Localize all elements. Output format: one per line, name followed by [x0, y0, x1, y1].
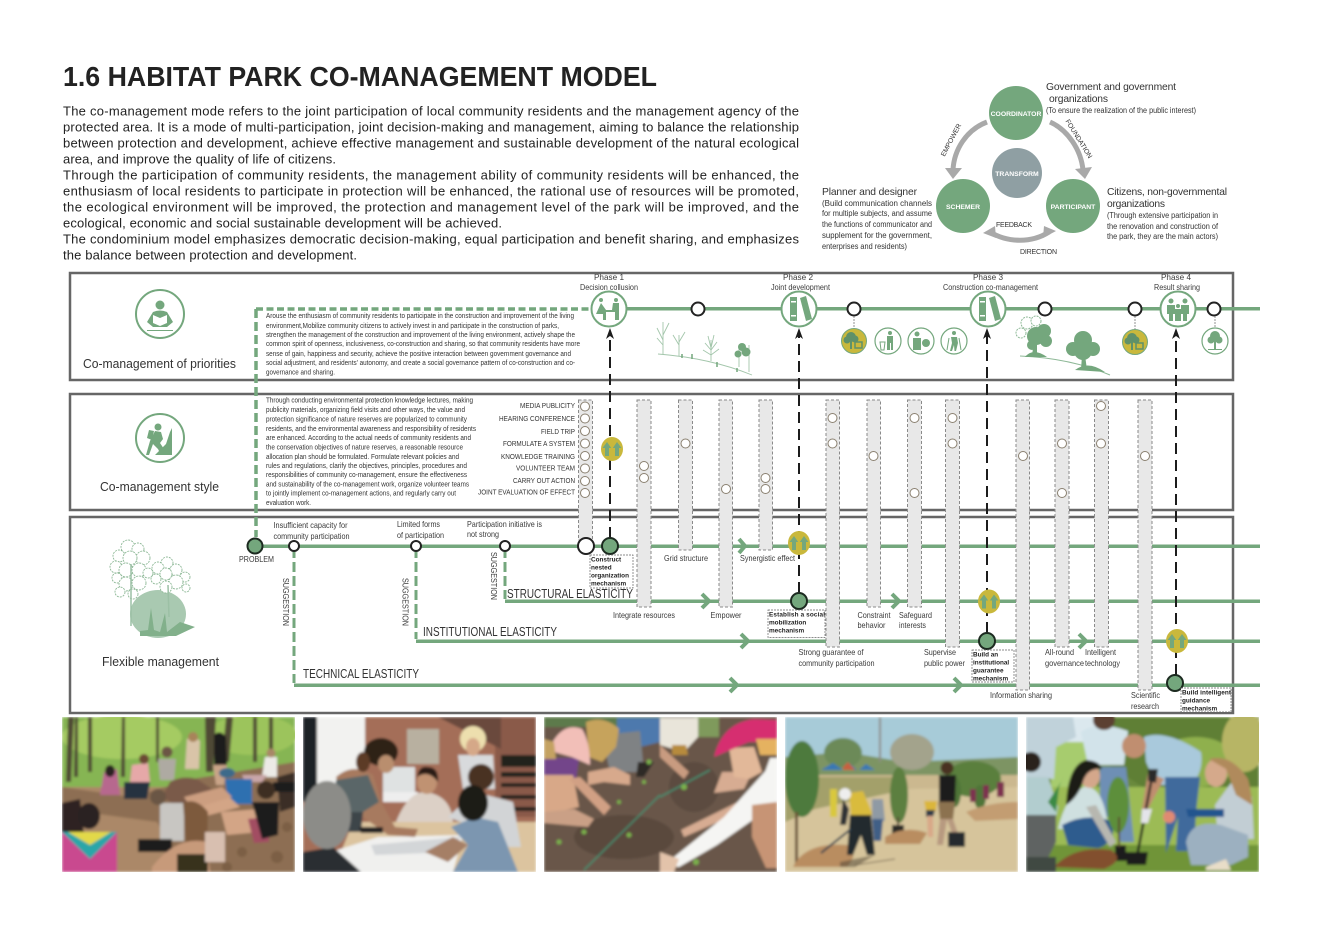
column labels: behavior	[858, 621, 886, 630]
photo: family planting tree	[1026, 717, 1259, 872]
intro text block: the balance between protection and development.	[63, 248, 357, 262]
icon: hiker	[136, 414, 184, 462]
activity labels: VOLUNTEER TEAM	[516, 466, 575, 472]
activity labels: FIELD TRIP	[541, 429, 575, 436]
citizens text: the park, they are the main actors)	[1107, 232, 1218, 241]
callout: social mobilization mechanism: mobilization	[769, 620, 806, 626]
paragraph: style description: residents, and the environmental awareness and responsibility of residents	[266, 426, 476, 433]
paragraph: style description: allocation plan should be formulated. Formulate relevant policies and	[266, 454, 459, 461]
column labels: Grid structure	[664, 554, 708, 563]
column labels: interests	[899, 621, 926, 630]
paragraph: style description: responsibilities of community co-management, ensure the effectiveness	[266, 472, 467, 479]
elasticity headings: TECHNICAL ELASTICITY	[303, 667, 420, 681]
icon: walker	[941, 328, 967, 354]
icon: litter	[875, 328, 901, 354]
arrow: foundation	[1050, 122, 1083, 170]
phase 2 label: Phase 2	[783, 273, 813, 282]
timeline nodes	[692, 302, 1220, 316]
paragraph: style description: rules and regulations, clarify the objectives, principles, procedures and	[266, 463, 467, 470]
column labels	[613, 554, 1160, 711]
intro text block: The condominium model emphasizes democratic decision-making, equal participation and benefit sharing, and emphasizes	[63, 232, 800, 246]
paragraph: style description: and sustainability of the co-management work, organize volunteer teams	[266, 482, 469, 488]
problem labels: community participation	[274, 532, 350, 541]
callout: institutional guarantee mechanism: institutional	[973, 660, 1009, 666]
problem labels: PROBLEM	[239, 555, 274, 564]
activity labels: CARRY OUT ACTION	[513, 478, 575, 485]
callout: institutional guarantee mechanism	[972, 650, 1014, 682]
citizens text	[1107, 187, 1227, 241]
phase 1 label: Phase 1	[594, 273, 624, 282]
callout: nested organization mechanism: mechanism	[591, 580, 626, 588]
timelines: elasticity lines	[255, 544, 1260, 687]
illustration: leafy trees on slope	[1016, 316, 1110, 375]
callout: nested organization mechanism: organization	[591, 572, 629, 580]
heading: co-management of priorities: Co-management of priorities	[83, 356, 236, 371]
photo: planting seedlings	[544, 717, 777, 872]
label: foundation: FOUNDATION	[1064, 119, 1093, 160]
arrowhead: foundation	[1075, 167, 1092, 179]
column labels: governance	[1045, 659, 1084, 668]
phase 2 label	[771, 273, 831, 292]
paragraph: style description: Through conducting environmental protection knowledge lectures, making	[266, 398, 473, 404]
intro text block: protected area. It is a mode of multi-participation, joint decision-making and management, aiming to balance the relationship	[63, 120, 799, 134]
phase 4 label: Result sharing	[1154, 283, 1200, 292]
callout: social mobilization mechanism: Establish a social	[769, 612, 825, 618]
paragraph: style description: publicity materials, organizing field visits and other ways, the value and	[266, 407, 465, 414]
icon: yellow tree two	[1122, 330, 1148, 354]
problem labels: not strong	[467, 530, 499, 539]
planner text: (Build communication channels	[822, 199, 932, 208]
government text: organizations	[1049, 94, 1108, 105]
callout: institutional guarantee mechanism: mechanism	[973, 676, 1008, 682]
suggestion labels: SUGGESTION	[400, 578, 410, 626]
intro text block: enthusiasm of local residents to participate in protection will be enhanced, the rational use of resources will be promoted,	[63, 184, 799, 198]
elasticity headings: INSTITUTIONAL ELASTICITY	[423, 625, 558, 639]
panel: flexible management	[70, 517, 1233, 713]
paragraph: priorities description: governance and sharing.	[266, 370, 335, 376]
phase 3 label: Phase 3	[973, 273, 1003, 282]
activity labels: KNOWLEDGE TRAINING	[501, 454, 575, 461]
paragraph: priorities description: sense of gain, happiness and security, achieve the positive interaction between government governance and	[266, 351, 571, 358]
column labels: Empower	[710, 611, 742, 620]
stakeholder cycle diagram	[822, 82, 1227, 256]
arrow: empower	[953, 122, 987, 170]
circle: schemer	[936, 179, 990, 233]
column labels: Synergistic effect	[740, 554, 796, 563]
phase 4 label: Phase 4	[1161, 273, 1191, 282]
elasticity headings: STRUCTURAL ELASTICITY	[507, 587, 634, 601]
photo: forest gathering	[62, 717, 295, 872]
government text: Government and government	[1046, 82, 1176, 93]
callout: intelligent guidance mechanism: guidance	[1182, 698, 1210, 704]
label: feedback: FEEDBACK	[996, 222, 1032, 229]
callout: nested organization mechanism: Construct	[591, 556, 622, 564]
column labels: technology	[1085, 659, 1121, 668]
dashed line: problem link	[254, 309, 258, 537]
citizens text: the renovation and construction of	[1107, 222, 1219, 231]
phase dashed arrows	[610, 336, 1176, 675]
activity labels: HEARING CONFERENCE	[499, 416, 575, 423]
planner text: supplement for the government,	[822, 231, 932, 240]
intro text block: between protection and development, achieve effective management and sustainable development of the natural ecological	[63, 136, 799, 150]
phase 3 label: Construction co-management	[943, 283, 1039, 292]
icon: yellow tree one	[842, 328, 866, 354]
problem labels: of participation	[397, 531, 444, 540]
label: empower: EMPOWER	[940, 123, 963, 158]
activity labels: JOINT EVALUATION OF EFFECT	[478, 490, 576, 496]
arrowhead: right	[1043, 226, 1056, 238]
phase arrowheads	[606, 328, 1180, 339]
callout: intelligent guidance mechanism: Build intelligent	[1182, 690, 1232, 696]
icon row	[842, 328, 1228, 354]
paragraph: priorities description: common spirit of openness, inclusiveness, co-construction and sharing, so that community residents have more	[266, 341, 580, 348]
grey activity columns	[578, 400, 1152, 690]
paragraph: priorities description	[266, 313, 580, 376]
intro text block: area, and improve the quality of life of citizens.	[63, 152, 336, 166]
citizens text: organizations	[1107, 199, 1165, 210]
paragraph: priorities description: environment,Mobilize community citizens to actively invest in and participate in the construction of parks,	[266, 323, 559, 330]
illustration: flexible trees	[110, 540, 195, 638]
problem labels: Insufficient capacity for	[274, 521, 348, 530]
illustration: bare trees on slope	[657, 322, 752, 375]
intro text block: ecological, economic and social sustainable development will be achieved.	[63, 216, 502, 230]
column labels: Supervise	[924, 648, 956, 657]
column labels: community participation	[798, 659, 875, 668]
callout: intelligent guidance mechanism: mechanism	[1182, 706, 1217, 712]
nodes: problem line	[248, 538, 618, 554]
intro text block: the ecological environment will be improved, the protection and management level of the park will be improved, and the	[63, 200, 799, 214]
callout: social mobilization mechanism	[768, 610, 825, 638]
planner text: for multiple subjects, and assume	[822, 209, 932, 218]
planner text: the functions of communicator and	[822, 220, 932, 229]
activity markers	[580, 402, 1150, 498]
callout: institutional guarantee mechanism: guarantee	[973, 668, 1004, 674]
activity labels: FORMULATE A SYSTEM	[503, 441, 575, 448]
column labels: Information sharing	[990, 691, 1052, 700]
intro text block	[63, 104, 800, 262]
icon: green tree	[1202, 328, 1228, 354]
phase 3 node	[970, 292, 1006, 326]
circle: participant	[1046, 179, 1100, 233]
suggestion labels: SUGGESTION	[489, 552, 498, 600]
circle: schemer: SCHEMER	[946, 204, 980, 211]
small connector lines	[854, 316, 1215, 329]
planner text	[822, 187, 932, 251]
photo: tree planting volunteers	[785, 717, 1018, 872]
callout: nested organization mechanism	[590, 555, 633, 588]
timeline: top green line	[256, 307, 1260, 310]
phase 2 node	[782, 292, 816, 326]
panel: co-management style	[70, 394, 1233, 510]
problem labels: Limited forms	[397, 520, 440, 529]
phase 4 node	[1160, 292, 1196, 326]
paragraph: style description: to jointly implement co-management actions, and regularly carry out	[266, 490, 456, 498]
callout: nested organization mechanism: nested	[591, 564, 612, 572]
activity labels: MEDIA PUBLICITY	[520, 403, 575, 410]
yellow nodes	[601, 437, 1188, 653]
arrow: feedback and direction	[990, 232, 1049, 240]
photo: planning meeting	[303, 717, 536, 872]
icon: reading person	[136, 290, 184, 338]
column labels: Constraint	[858, 611, 891, 620]
planner text: enterprises and residents)	[822, 242, 907, 251]
column labels: Intelligent	[1085, 648, 1117, 657]
citizens text: (Through extensive participation in	[1107, 211, 1218, 220]
phase 3 label	[943, 273, 1039, 292]
line arrows	[702, 539, 1086, 692]
paragraph: priorities description: strengthen the management of the construction and improvement of the living environment, actively shape the	[266, 332, 575, 339]
column labels: Scientific	[1131, 691, 1160, 700]
paragraph: style description: the conservation objectives of nature reserves, a reasonable resource	[266, 444, 463, 452]
panel: co-management of priorities	[70, 273, 1233, 380]
paragraph: style description: are enhanced. According to the actual needs of community residents and	[266, 435, 471, 442]
circle: coordinator: COORDINATOR	[991, 111, 1041, 118]
column labels: Integrate resources	[613, 611, 675, 620]
circle: transform: TRANSFORM	[995, 171, 1039, 178]
heading: flexible management: Flexible management	[102, 655, 220, 669]
citizens text: Citizens, non-governmental	[1107, 187, 1227, 198]
phase 1 node	[592, 292, 626, 326]
heading: co-management style: Co-management style	[100, 479, 219, 494]
mechanism nodes	[791, 593, 1183, 691]
planner text: Planner and designer	[822, 187, 918, 198]
title: 1.6 HABITAT PARK CO-MANAGEMENT MODEL	[63, 61, 657, 92]
phase 1 label	[580, 273, 638, 292]
circle: transform	[992, 148, 1042, 198]
column labels: research	[1131, 702, 1159, 711]
activity labels	[478, 403, 576, 496]
callout: intelligent guidance mechanism	[1181, 688, 1232, 712]
intro text block: Through the participation of community residents, the management ability of community residents will be enhanced, the	[63, 168, 799, 182]
circle: participant: PARTICIPANT	[1051, 204, 1096, 211]
callout: institutional guarantee mechanism: Build an	[973, 652, 998, 658]
government text: (To ensure the realization of the public interest)	[1046, 106, 1196, 115]
callout: social mobilization mechanism: mechanism	[769, 628, 804, 634]
phase 4 label	[1154, 273, 1200, 292]
paragraph: style description	[266, 398, 476, 507]
paragraph: style description: evaluation work.	[266, 500, 311, 507]
government text	[1046, 82, 1196, 115]
column labels: Strong guarantee of	[798, 648, 864, 657]
circle: coordinator	[989, 86, 1043, 140]
paragraph: style description: protection significance of nature reserves are popularized to community	[266, 416, 467, 424]
label: direction: DIRECTION	[1020, 249, 1057, 256]
elasticity headings	[303, 587, 634, 681]
arrowhead: empower	[945, 168, 962, 179]
problem labels: Participation initiative is	[467, 520, 542, 529]
paragraph: priorities description: social adjustment, and residents' autonomy, and create a social governance pattern of co-construction and co-	[266, 360, 576, 367]
column labels: Safeguard	[899, 611, 932, 620]
icon: planting	[908, 328, 934, 354]
suggestion labels: SUGGESTION	[281, 578, 290, 626]
paragraph: priorities description: Arouse the enthusiasm of community residents to participate in the construction and improvement of the living	[266, 313, 574, 320]
phase 2 label: Joint development	[771, 283, 831, 292]
phase 1 label: Decision collusion	[580, 283, 638, 292]
suggestion labels	[281, 552, 498, 626]
intro text block: The co-management mode refers to the joint participation of local community residents and the management agency of the	[63, 104, 799, 118]
column labels: All-round	[1045, 648, 1074, 657]
problem labels	[239, 520, 542, 564]
arrowhead: left	[983, 226, 996, 238]
column labels: public power	[924, 659, 965, 668]
